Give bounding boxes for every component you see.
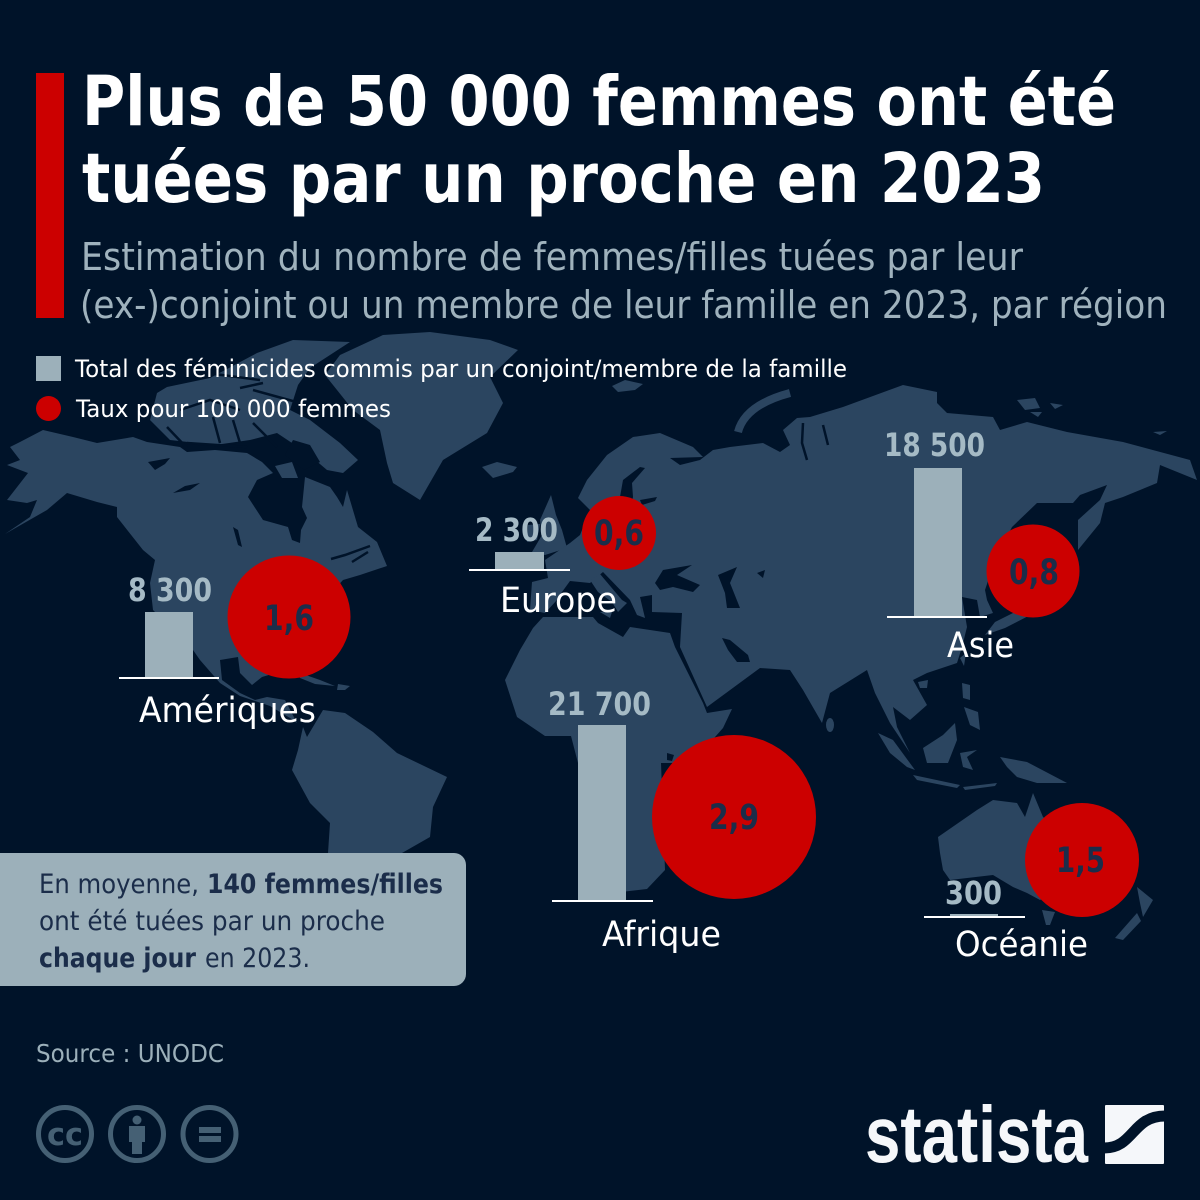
map: Madagascar (668, 812, 684, 862)
bar: Afrique total (578, 725, 626, 900)
bar: Europe total (495, 552, 544, 569)
baseline: Afrique (552, 900, 653, 902)
map: Java and Sunda islands (913, 775, 997, 790)
circle: Afrique rate (652, 735, 816, 899)
map: Southampton Island (275, 462, 298, 478)
map: seas, lakes and channels (148, 373, 828, 761)
map: Iceland (482, 462, 517, 478)
region: Amériques (119, 556, 350, 731)
callout text (39, 869, 443, 974)
map: South America (292, 710, 447, 985)
region: Asie (884, 426, 1080, 666)
map: Borneo (923, 723, 957, 763)
label: Amériques: Amériques (139, 691, 316, 731)
callout text: ont été tuées par un proche (39, 906, 385, 937)
map: Arctic islands of Russia (612, 380, 1167, 435)
map: Novaya Zemlya (738, 393, 790, 432)
map: Cuba and Hispaniola (297, 672, 350, 690)
icon: no derivatives (183, 1108, 236, 1160)
circle: Amériques rate (228, 556, 350, 678)
label: Europe: Europe (500, 581, 617, 621)
map: Sumatra (878, 733, 915, 770)
value: Europe total: 2 300 (475, 511, 558, 549)
callout text: 140 femmes/filles (207, 869, 443, 900)
region: Afrique (548, 685, 816, 955)
map: Canadian Arctic islands (150, 340, 358, 473)
legend: rate label: Taux pour 100 000 femmes (75, 395, 391, 423)
baseline: Asie (887, 616, 987, 618)
value: Europe rate: 0,6 (594, 514, 644, 554)
legend: rate swatch (36, 396, 61, 421)
value: Afrique rate: 2,9 (709, 798, 759, 838)
icon: creative commons (38, 1108, 92, 1160)
value: Afrique total: 21 700 (548, 685, 651, 723)
map: Philippines (962, 683, 980, 730)
callout text: en 2023. (205, 943, 310, 974)
map: Japan (985, 600, 1040, 635)
icon: attribution (110, 1108, 164, 1160)
map: Greenland (325, 332, 518, 500)
title (82, 62, 1116, 219)
source: Source : UNODC (36, 1039, 224, 1068)
baseline: Amériques (119, 677, 219, 679)
map: Australia (938, 793, 1085, 900)
title: tuées par un proche en 2023 (82, 139, 1045, 219)
world map (5, 332, 1197, 985)
map: Sri Lanka (826, 718, 834, 732)
label: Asie: Asie (947, 626, 1014, 666)
value: Asie rate: 0,8 (1009, 553, 1059, 593)
value: Océanie total: 300 (945, 874, 1002, 912)
callout text: En moyenne, (39, 869, 199, 900)
logo wordmark: statista (865, 1090, 1088, 1179)
bar: Amériques total (145, 612, 193, 678)
map: Sulawesi (960, 750, 977, 770)
map: Italy (590, 574, 627, 618)
legend: total swatch (36, 356, 61, 381)
circle: Europe rate (582, 496, 656, 570)
bar: Asie total (914, 468, 962, 616)
callout panel (0, 853, 466, 986)
map: Tasmania (1042, 910, 1055, 925)
value: Amériques rate: 1,6 (264, 599, 314, 639)
circle: Océanie rate (1025, 803, 1139, 917)
subtitle: Estimation du nombre de femmes/filles tuées par leur (81, 235, 1023, 279)
value: Océanie rate: 1,5 (1056, 841, 1105, 881)
value: Asie total: 18 500 (884, 426, 985, 464)
legend (36, 355, 847, 423)
callout text: chaque jour (39, 943, 197, 974)
bar: Océanie total (950, 914, 998, 916)
red title accent bar (36, 73, 64, 318)
map: North America (5, 430, 387, 723)
logo mark (1104, 1105, 1165, 1164)
map: New Guinea (1000, 757, 1067, 783)
baseline: Europe (469, 569, 570, 571)
label: Afrique: Afrique (602, 915, 721, 955)
region: Océanie (924, 803, 1139, 965)
map: British Isles (527, 495, 567, 555)
label: Océanie: Océanie (955, 925, 1088, 965)
statista logo (865, 1090, 1165, 1179)
subtitle (80, 235, 1167, 327)
value: Amériques total: 8 300 (128, 571, 212, 609)
map: Eurasia (530, 385, 1197, 753)
map: New Zealand (1115, 887, 1153, 940)
icon: creative commons: cc (47, 1117, 83, 1153)
legend: total label: Total des féminicides commis par un conjoint/membre de la famille (74, 355, 847, 383)
baseline: Océanie (924, 916, 1025, 918)
licence icons (38, 1108, 236, 1160)
circle: Asie rate (986, 524, 1080, 618)
callout: daily average (0, 853, 466, 986)
map: Hainan and Taiwan (918, 653, 966, 688)
region: Europe (469, 496, 656, 621)
map: Africa (505, 617, 732, 893)
